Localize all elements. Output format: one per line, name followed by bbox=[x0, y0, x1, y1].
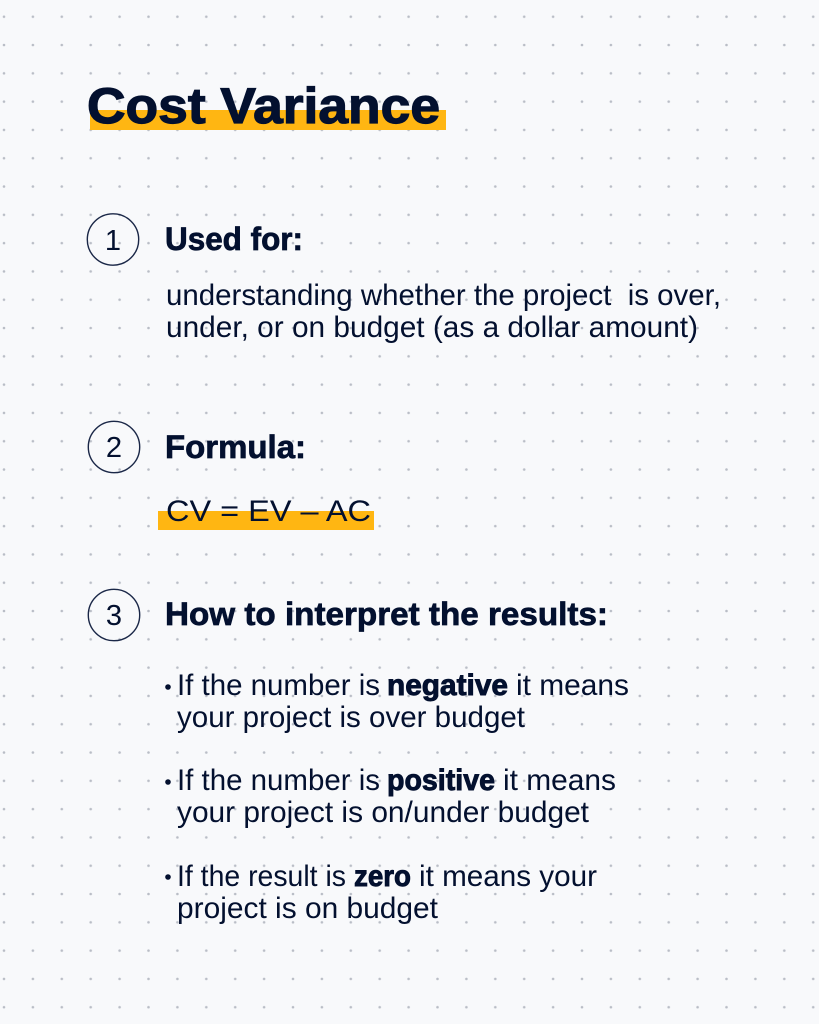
description text: understanding whether the project is over, bbox=[166, 279, 721, 312]
bullet: zero: zero bbox=[354, 860, 411, 893]
heading: how to interpret the results: How to interpret the results: bbox=[165, 596, 608, 632]
section 1: used for bbox=[87, 214, 721, 344]
bullet: negative bbox=[165, 669, 629, 734]
section 2: formula bbox=[88, 421, 374, 530]
number badge 2: 2 bbox=[106, 432, 122, 464]
bullet: positive bbox=[165, 764, 616, 829]
bullet: negative: If the number is bbox=[177, 669, 380, 702]
bullet: negative: negative bbox=[387, 669, 508, 702]
number badge 1: 1 bbox=[105, 225, 121, 257]
description text: under, or on budget (as a dollar amount) bbox=[166, 311, 698, 344]
bullet: positive: If the number is bbox=[177, 764, 380, 797]
bullet: zero bbox=[165, 860, 597, 925]
number badge 1 bbox=[87, 214, 139, 265]
bullet: positive: positive bbox=[387, 764, 495, 797]
bullet: positive: it means bbox=[503, 764, 616, 797]
bullet: negative: your project is over budget bbox=[177, 701, 525, 734]
formula with highlight: CV = EV – AC bbox=[166, 495, 371, 528]
number badge 3 bbox=[88, 589, 140, 641]
section 3: how to interpret bbox=[88, 589, 629, 925]
bullet: positive: your project is on/under budget bbox=[177, 796, 589, 829]
title: Cost Variance with highlight: Cost Variance bbox=[87, 78, 440, 134]
bullet: zero: it means your bbox=[419, 860, 597, 893]
bullet: zero: project is on budget bbox=[177, 892, 438, 925]
number badge 2 bbox=[88, 421, 140, 473]
bullet: negative: it means bbox=[516, 669, 629, 702]
number badge 3: 3 bbox=[106, 600, 122, 632]
description text bbox=[166, 279, 721, 344]
heading: used for: Used for: bbox=[165, 221, 303, 257]
bullet: zero: If the result is bbox=[177, 860, 346, 893]
heading: formula: Formula: bbox=[165, 429, 306, 465]
